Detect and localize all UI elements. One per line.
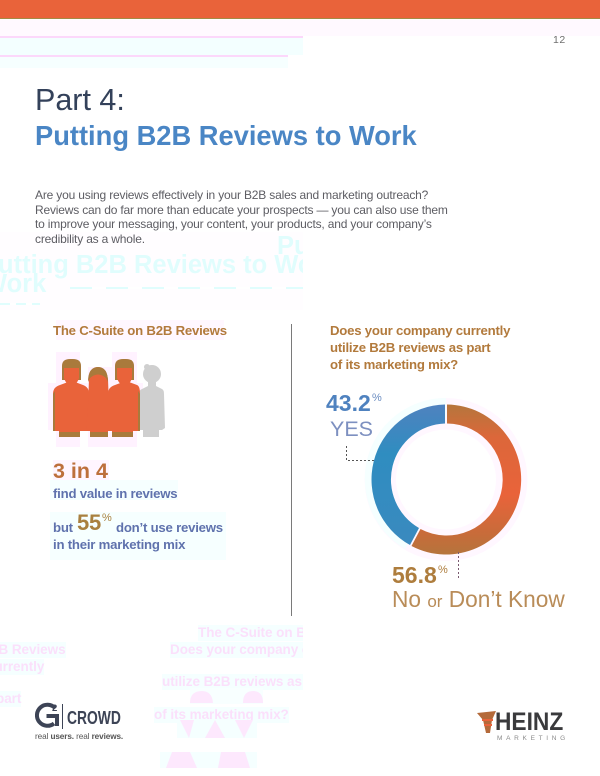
label: 56.8% No or Don't Know: 56.8 [392,562,437,588]
left column heading: The C-Suite on B2B Reviews [53,323,227,338]
top orange bar [0,0,600,19]
stat: 55 percent: in their marketing mix [53,537,185,552]
icon: four people [53,359,165,437]
intro paragraph: to improve your messaging, your content, your products, and your company’s [35,217,432,231]
label: 43.2% YES: % [372,392,382,404]
ghost people [160,691,263,768]
yes leader line [346,446,374,461]
label: 56.8% No or Don't Know [392,562,565,612]
grey person [139,364,165,437]
woman [86,367,112,437]
ghost text [0,625,303,723]
right column question: utilize B2B reviews as part [330,340,490,355]
intro paragraph: Reviews can do far more than educate your prospects — you can also use them [35,203,448,217]
man right [108,359,140,437]
intro paragraph: Are you using reviews effectively in your B2B sales and marketing outreach? [35,188,428,202]
label: 43.2% YES: 43.2 [326,390,371,416]
stat: 55 percent: don’t use reviews [116,520,223,535]
logo: G2 Crowd: 2 [52,703,57,714]
logo: Heinz Marketing: HEINZ [495,708,563,736]
stat: 3 in 4: 3 in 4 [53,459,108,483]
logo: Heinz Marketing: MARKETING [497,735,569,742]
stat text: find value in reviews [53,486,177,501]
page number: 12 [553,34,566,46]
label: 43.2% YES [326,390,382,441]
man left [53,359,89,437]
intro paragraph: credibility as a whole. [35,232,145,246]
donut chart [365,398,522,554]
label: 43.2% YES: YES [330,417,373,441]
title: Putting B2B Reviews to Work [35,120,417,151]
ghost text: of its marketing mix? [154,707,289,722]
stat: 55 percent: but [53,520,73,535]
label: 56.8% No or Don't Know: No or Don’t Know [392,586,565,612]
ghost stripes [0,20,600,36]
no leader line [458,552,459,578]
logo: Heinz Marketing [477,708,569,742]
logo: G2 Crowd: CROWD [67,708,121,728]
title [35,83,417,151]
logo: G2 Crowd: real users. real reviews. [35,732,123,741]
right column question: Does your company currently [330,323,510,338]
right column question: of its marketing mix? [330,357,458,372]
stat: 55 percent: 55 [77,510,101,535]
logo: G2 Crowd [35,702,123,741]
ghost heading [0,232,303,310]
stat: 55 percent: % [102,512,112,524]
title: Part 4: [35,83,125,117]
intro paragraph [35,188,448,246]
stat: 55 percent [53,510,223,552]
label: 56.8% No or Don't Know: % [438,564,448,576]
right column question [330,323,510,372]
divider [291,324,292,616]
yes segment [372,404,445,545]
no or don't know segment [412,404,521,554]
